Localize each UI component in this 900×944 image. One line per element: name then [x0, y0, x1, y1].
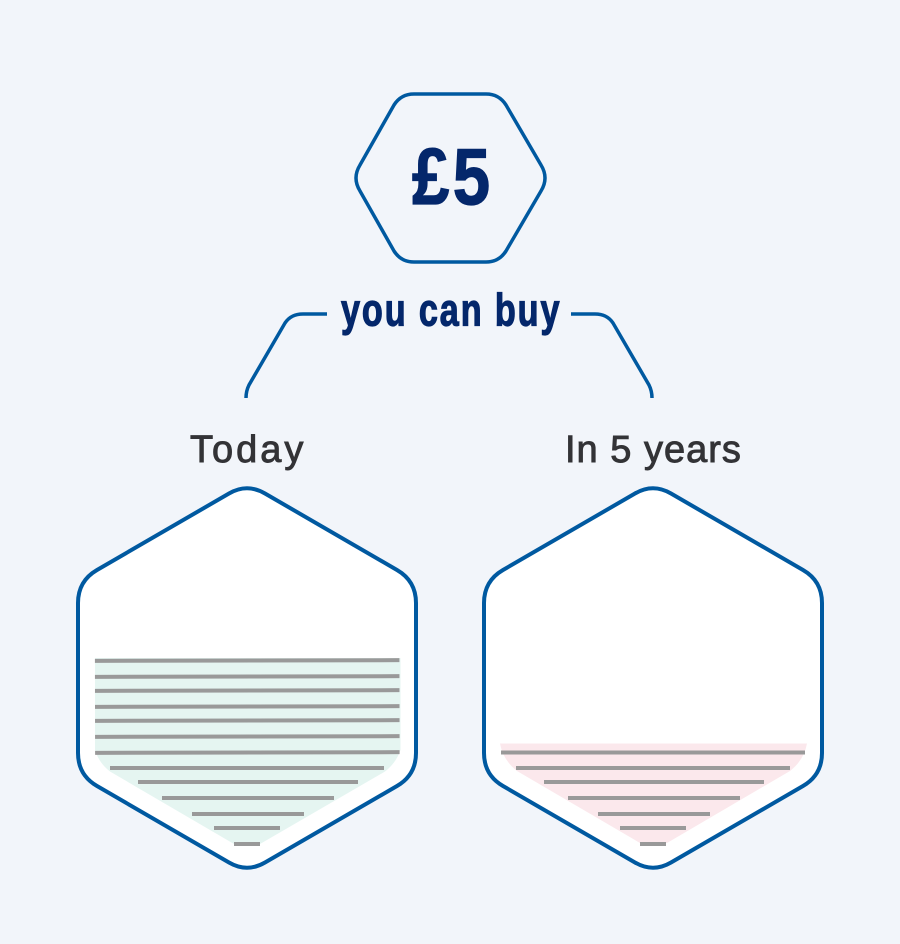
shopping lines	[95, 658, 400, 846]
panel: today hexagon	[78, 488, 416, 868]
connector: right branch	[571, 314, 652, 398]
label: Today: Today	[190, 429, 306, 471]
fill: green amount	[95, 658, 400, 844]
panel: in 5 years hexagon	[484, 488, 822, 868]
shopping lines	[501, 750, 805, 846]
top hexagon: £5	[356, 94, 545, 262]
label: In 5 years: In 5 years	[565, 429, 742, 471]
heading: you can buy: you can buy	[341, 286, 561, 336]
connector: left branch	[246, 314, 327, 398]
fill: pink amount	[500, 744, 807, 843]
amount: £5	[412, 131, 493, 221]
